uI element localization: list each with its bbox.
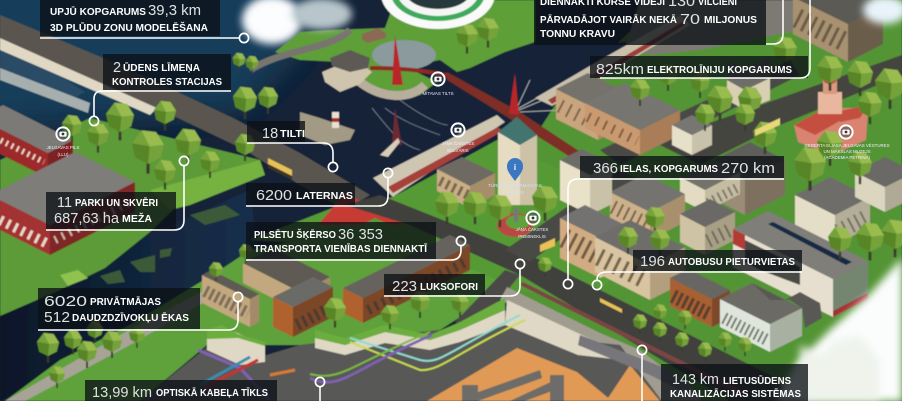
- label: traffic lights: [384, 259, 525, 296]
- brown block: [273, 277, 333, 337]
- tan block large: [243, 248, 330, 312]
- museum: [794, 74, 868, 155]
- right orange pit: [606, 365, 660, 401]
- tan block centre: [437, 157, 495, 208]
- label: traffic lights: 223: [392, 279, 417, 295]
- orange pit: [427, 348, 612, 401]
- label: power lines: [590, 0, 810, 78]
- label: traffic: TRANSPORTA VIENĪBAS DIENNAKTĪ: [254, 243, 428, 255]
- label: houses: 6020: [44, 294, 87, 310]
- label: houses: DAUDZDZĪVOKĻU ĒKAS: [72, 312, 189, 324]
- label: bridges: [247, 121, 338, 172]
- camera: Jāņa Čakstes bulvāris: JĀŅA ČAKSTES: [442, 141, 474, 146]
- label: water level stations: KONTROLES STACIJAS: [112, 76, 222, 88]
- tan block mid: [610, 174, 685, 240]
- lighthouse: [300, 112, 355, 145]
- label: traffic lights: LUKSOFORI: [420, 281, 478, 293]
- diagonal boulevard with red path: [373, 115, 505, 197]
- pale block right: [795, 177, 870, 245]
- label: power lines: ELEKTROLĪNIJU KOPGARUMS: [647, 64, 792, 76]
- label: parks: 11: [57, 195, 72, 211]
- grey cream block under label: [727, 56, 770, 110]
- label: bus stops: [592, 250, 802, 290]
- foam mist bottom right: [775, 258, 902, 401]
- dark crossing road: [345, 195, 800, 401]
- buses: [268, 118, 780, 313]
- large tan wing two: [585, 83, 680, 155]
- label: river length: 3D PLŪDU ZONU MODELĒŠANA: [50, 21, 208, 34]
- grey curved road: [250, 30, 350, 70]
- upper right road: [600, 60, 800, 165]
- label: storm sewer: KANALIZĀCIJAS SISTĒMAS: [670, 388, 801, 400]
- tan block behind: [710, 142, 785, 215]
- label: bridges: 18: [262, 126, 278, 142]
- label: storm sewer: 143 km: [672, 372, 719, 388]
- icon: tourism info pin: [488, 158, 542, 195]
- tan block small: [202, 270, 259, 327]
- label: parks: PARKI UN SKVĒRI: [75, 197, 158, 209]
- camera: Jāņa Čakstes bulvāris: [442, 123, 474, 153]
- label: trains: [534, 0, 783, 45]
- label: storm sewer: LIETUSŪDENS: [723, 375, 791, 387]
- horizontal pipe: [578, 335, 690, 395]
- label: houses: [38, 288, 243, 330]
- monument plaza: [497, 208, 533, 237]
- label: optical cable: [85, 377, 325, 401]
- right ground: [400, 0, 902, 401]
- left green bank: [0, 118, 260, 316]
- icon: tourism info pin: i: [514, 163, 516, 172]
- label: streets: 366: [593, 161, 618, 177]
- label: water level stations: 2: [113, 60, 121, 76]
- small hut: [362, 28, 386, 43]
- camera: Jāņa Čakstes piemineklis: PIEMINEKLIS: [518, 234, 546, 239]
- soil edge cuts: [207, 298, 640, 365]
- paved wide road: [500, 287, 700, 401]
- tree reflections: [100, 205, 240, 284]
- label: parks: MEŽA: [122, 212, 152, 225]
- camera: Mītavas tilts: [422, 72, 454, 96]
- foam top right: [863, 0, 902, 24]
- brown block south: [670, 269, 730, 327]
- label: streets: IELAS, KOPGARUMS: [620, 163, 718, 175]
- top right mist: [242, 0, 302, 44]
- label: street lamps: LATERNAS: [296, 190, 353, 202]
- camera: Mītavas tilts: MĪTAVAS TILTS: [422, 91, 454, 96]
- palace one: [0, 105, 73, 178]
- small pale block: [672, 115, 712, 155]
- camera: Jāņa Čakstes piemineklis: JĀŅA ČAKSTES: [516, 227, 548, 232]
- mitava bridge: [370, 35, 585, 162]
- lawn lighter patch: [60, 270, 88, 286]
- label: traffic: 36 353: [338, 227, 383, 243]
- label: houses: PRIVĀTMĀJAS: [90, 296, 161, 308]
- camera: museum: UN MĀKSLAS MUZEJS: [823, 149, 871, 154]
- label: parks: [46, 156, 189, 230]
- darker top ground: [625, 0, 800, 55]
- tan block street two: [595, 220, 685, 300]
- mitava island: [345, 62, 437, 100]
- label: river length: [40, 0, 249, 43]
- icon: tourism info pin: CENTRS: [506, 190, 524, 195]
- white green block: [720, 283, 822, 352]
- label: traffic: PILSĒTU ŠĶĒRSO: [254, 228, 336, 241]
- underground grey layer: [140, 310, 662, 401]
- right edge block: [855, 157, 902, 212]
- central green ground: [250, 140, 640, 300]
- river reflection lines: [372, 100, 448, 150]
- camera: museum: [804, 125, 890, 160]
- label: river length: UPJŪ KOPGARUMS: [50, 6, 146, 18]
- tower with info point: [498, 117, 537, 205]
- label: water level stations: ŪDENS LĪMEŅA: [123, 62, 200, 74]
- glass dome: [372, 40, 436, 70]
- label: parks: 687,63 ha: [54, 211, 120, 227]
- river piece at top: [530, 40, 640, 100]
- lower-left green plateau: [5, 240, 510, 401]
- label: optical cable: OPTISKĀ KABEĻA TĪKLS: [156, 387, 268, 399]
- camera: Jelgavas pils: JELGAVAS PILS: [47, 145, 79, 150]
- road right: [660, 55, 902, 165]
- label: bus stops: AUTOBUSU PIETURVIETAS: [668, 256, 795, 268]
- label: bus stops: 196: [640, 254, 665, 270]
- label: storm sewer: [637, 345, 808, 401]
- lower river: [0, 190, 260, 401]
- red cycle lane: [520, 282, 745, 394]
- label: river length: 39,3 km: [148, 3, 201, 19]
- large tan wing: [556, 73, 630, 140]
- pipes in pit: [462, 370, 564, 401]
- camera: museum: ĢEDERTA ELIASA JELGAVAS VĒSTURES: [804, 143, 890, 148]
- boulevard far part: [535, 15, 690, 106]
- tan block mid right: [680, 199, 735, 255]
- stadium ring: [381, 0, 495, 29]
- label: optical cable: 13,99 km: [92, 385, 152, 401]
- shopping centre: [733, 211, 868, 317]
- icon: tourism info pin: TŪRISMA INFORMĀCIJAS: [488, 183, 542, 188]
- top right block: [793, 0, 883, 62]
- label: street lamps: 6200: [256, 188, 292, 204]
- dock: [322, 58, 372, 92]
- lower road ramp: [455, 270, 520, 330]
- label: trains: 70: [680, 12, 700, 28]
- label: trains: MILJONUS: [704, 14, 757, 26]
- colored utility lines: [198, 315, 525, 400]
- palace two: [0, 152, 135, 255]
- label: streets: 270 km: [721, 161, 775, 177]
- camera: Jelgavas pils: (LLU): [58, 152, 69, 157]
- tan block street: [560, 205, 625, 278]
- label: trains: TONNU KRAVU: [540, 28, 615, 40]
- camera: Jāņa Čakstes piemineklis: [516, 211, 548, 239]
- foam under label: [800, 335, 880, 401]
- side road up: [505, 170, 640, 262]
- label: water level stations: [89, 54, 231, 126]
- trees on top bank: [456, 18, 499, 54]
- cream block: [680, 160, 740, 212]
- label: bridges: TILTI: [280, 128, 305, 140]
- long brown block: [343, 235, 470, 323]
- label: streets: [563, 156, 784, 289]
- camera: Jāņa Čakstes bulvāris: BULVĀRIS: [447, 148, 469, 153]
- cream tall block: [560, 149, 612, 215]
- red roof: [318, 193, 405, 225]
- label: street lamps: [246, 168, 393, 206]
- bridge: [0, 15, 370, 210]
- mist over road: [292, 0, 352, 30]
- label: traffic: [246, 222, 466, 260]
- label: houses: 512: [44, 310, 70, 326]
- upper left water: [0, 0, 310, 130]
- label: power lines: 825km: [596, 62, 644, 78]
- label: trains: PĀRVADĀJOT VAIRĀK NEKĀ: [540, 14, 677, 26]
- boat: [380, 138, 400, 157]
- top green bank: [275, 0, 535, 72]
- camera: Jelgavas pils: [47, 127, 79, 157]
- lower-left path: [5, 290, 215, 401]
- park bright strip: [150, 160, 265, 210]
- camera: museum: (ACADEMIA PETRINA): [824, 155, 870, 160]
